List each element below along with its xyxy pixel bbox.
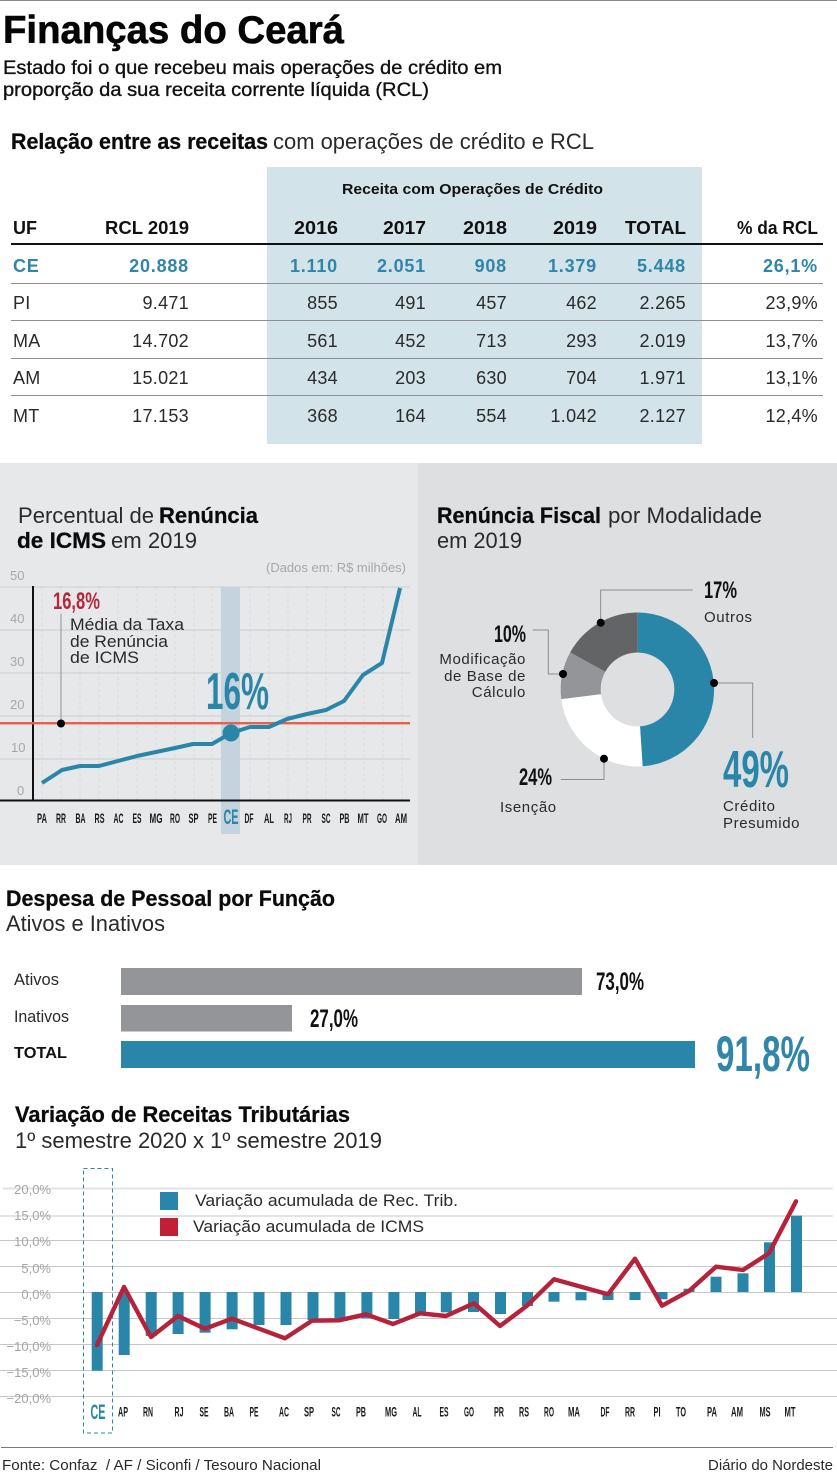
state labels: GO — [464, 1404, 474, 1420]
callout: Isenção 24% — [500, 755, 608, 816]
heading: tax revenue variation: Variação de Receitas Tributárias — [15, 1102, 350, 1127]
row PI — [13, 293, 818, 313]
row CE: 20.888 — [129, 256, 189, 276]
y axis labels: 10 — [11, 740, 25, 755]
callout: Modificação de Base de Cálculo 10% — [439, 621, 567, 701]
state labels: AC — [114, 810, 124, 826]
state labels: AP — [118, 1404, 128, 1420]
header row: 2019 — [553, 218, 597, 238]
state labels: DF — [600, 1404, 610, 1420]
line chart: ICMS waiver by state — [0, 568, 410, 834]
state labels: AM — [731, 1404, 743, 1420]
row AM: 13,1% — [765, 368, 818, 388]
row AM: 704 — [566, 368, 597, 388]
subtitle: proporção da sua receita corrente líquida (RCL) — [3, 79, 429, 101]
heading: personnel expense: Ativos e Inativos — [6, 911, 165, 936]
average callout: de ICMS — [70, 649, 139, 667]
callout: Isenção 24%: 24% — [519, 764, 552, 791]
state labels: SP — [188, 810, 198, 826]
bar: Ativos: 73,0% — [596, 968, 644, 996]
state labels: AL — [264, 810, 274, 826]
state labels: BA — [224, 1404, 234, 1420]
row AM: 15.021 — [132, 368, 189, 388]
y axis labels: −10,0% — [7, 1339, 51, 1354]
row PI: 855 — [307, 293, 338, 313]
heading: waiver by type: por Modalidade — [608, 503, 762, 528]
row MT: MT — [13, 406, 40, 426]
y axis labels: −5,0% — [14, 1313, 51, 1328]
publisher credit: Diário do Nordeste — [708, 1458, 833, 1474]
state labels: DF — [244, 810, 254, 826]
state labels: MA — [568, 1404, 580, 1420]
y axis labels: 20 — [10, 697, 24, 712]
highlighted credit operations panel — [267, 167, 702, 444]
state labels: PR — [302, 810, 312, 826]
row PI: PI — [13, 293, 31, 313]
bar: Ativos — [14, 968, 644, 996]
row CE — [13, 256, 818, 276]
y axis labels: 30 — [10, 654, 24, 669]
heading: waiver by type: Renúncia Fiscal — [437, 503, 601, 528]
state labels: RS — [94, 810, 104, 826]
average callout: Média da Taxa — [70, 616, 185, 634]
heading: personnel expense: Despesa de Pessoal por Função — [6, 886, 335, 911]
callout: Modificação de Base de Cálculo 10%: 10% — [494, 621, 526, 648]
row AM: 434 — [307, 368, 338, 388]
bar: total — [14, 1026, 810, 1082]
state labels — [118, 1404, 796, 1420]
combo chart: tax revenue variation — [0, 1168, 837, 1433]
row MT — [13, 406, 818, 426]
row MT: 164 — [395, 406, 426, 426]
CE dot — [222, 724, 240, 742]
y axis labels: 40 — [10, 611, 24, 626]
table heading: Relação entre as receitas — [11, 129, 268, 154]
state labels: MT — [784, 1404, 796, 1420]
y axis labels — [7, 1182, 51, 1406]
state labels: RR — [56, 810, 66, 826]
waiver trend line — [42, 588, 400, 783]
y axis labels: 10,0% — [14, 1234, 51, 1249]
y axis labels: −15,0% — [7, 1365, 51, 1380]
heading: waiver by type: em 2019 — [437, 528, 522, 553]
row MA: 452 — [395, 331, 426, 351]
subtitle — [3, 57, 502, 101]
heading: waiver by type — [437, 503, 762, 553]
row CE: CE — [13, 256, 40, 276]
state labels: RJ — [284, 810, 292, 826]
heading: ICMS waiver: Percentual de — [18, 503, 154, 528]
heading: ICMS waiver: de ICMS — [17, 528, 106, 553]
heading: ICMS waiver — [17, 503, 259, 553]
state labels: MG — [385, 1404, 397, 1420]
row PI: 462 — [566, 293, 597, 313]
average line — [0, 722, 410, 724]
bar: Inativos: Inativos — [14, 1008, 69, 1026]
row MA: 2.019 — [639, 331, 686, 351]
state labels: PB — [356, 1404, 366, 1420]
row AM: 630 — [476, 368, 507, 388]
row PI: 9.471 — [142, 293, 189, 313]
y axis labels: 0,0% — [21, 1287, 51, 1302]
subtitle: Estado foi o que recebeu mais operações de crédito em — [3, 57, 502, 79]
table heading: com operações de crédito e RCL — [273, 129, 594, 154]
state labels: RR — [625, 1404, 635, 1420]
state labels: PE — [250, 1404, 258, 1420]
y axis labels: 0 — [17, 783, 24, 798]
heading: tax revenue variation: 1º semestre 2020 x 1º semestre 2019 — [15, 1128, 382, 1153]
CE highlight box — [84, 1168, 112, 1433]
callout: Crédito Presumido 49%: Presumido — [723, 815, 800, 832]
row MA: 293 — [566, 331, 597, 351]
title: Finanças do Ceará — [3, 9, 344, 52]
state labels: GO — [377, 810, 387, 826]
row MT: 368 — [307, 406, 338, 426]
callout: Isenção 24%: Isenção — [500, 799, 557, 816]
callout: Crédito Presumido 49% — [710, 679, 800, 832]
row MT: 17.153 — [132, 406, 189, 426]
CE highlight band — [221, 587, 240, 834]
average callout — [53, 588, 185, 728]
callout: Modificação de Base de Cálculo 10%: Cálculo — [472, 684, 526, 701]
row CE: 5.448 — [637, 256, 686, 276]
row MT: 554 — [476, 406, 507, 426]
row PI: 457 — [476, 293, 507, 313]
row AM — [13, 368, 818, 388]
state labels: AM — [395, 810, 407, 826]
row MT: 1.042 — [550, 406, 597, 426]
bar: Inativos — [14, 1005, 358, 1033]
y axis labels: 5,0% — [21, 1261, 51, 1276]
heading: personnel expense — [6, 886, 335, 936]
row MA: 13,7% — [765, 331, 818, 351]
header row: 2018 — [463, 218, 507, 238]
header row: 2016 — [294, 218, 338, 238]
state labels: RN — [143, 1404, 153, 1420]
row CE: 2.051 — [377, 256, 426, 276]
state labels: ES — [440, 1404, 448, 1420]
data unit note: (Dados em: R$ milhões) — [266, 561, 406, 575]
legend: Variação acumulada de Rec. Trib. — [195, 1191, 458, 1210]
callout: Outros 17%: Outros — [704, 609, 753, 626]
legend — [160, 1191, 458, 1236]
state labels: TO — [676, 1404, 686, 1420]
header row: UF — [13, 218, 37, 238]
CE axis label: CE — [224, 806, 238, 829]
average callout: 16,8% — [53, 588, 100, 615]
state labels: RO — [170, 810, 180, 826]
row AM: 1.971 — [639, 368, 686, 388]
header row: 2017 — [383, 218, 426, 238]
row MA — [13, 331, 818, 351]
state labels: RS — [519, 1404, 529, 1420]
header row — [13, 218, 818, 238]
y axis labels: −20,0% — [7, 1391, 51, 1406]
ICMS line — [97, 1201, 796, 1345]
row MT: 12,4% — [765, 406, 818, 426]
header row: RCL 2019 — [105, 218, 189, 238]
heading: ICMS waiver: em 2019 — [111, 528, 197, 553]
row CE: 1.379 — [548, 256, 597, 276]
state labels: MS — [760, 1404, 770, 1420]
callout: Modificação de Base de Cálculo 10%: de Base de — [444, 668, 526, 685]
table super-header: Receita com Operações de Crédito — [342, 182, 603, 198]
y axis labels: 15,0% — [14, 1208, 51, 1223]
row PI: 491 — [395, 293, 426, 313]
state labels: AL — [412, 1404, 422, 1420]
state labels: RO — [544, 1404, 554, 1420]
row AM: 203 — [395, 368, 426, 388]
state labels: BA — [76, 810, 86, 826]
state labels — [37, 810, 407, 826]
state labels: PA — [707, 1404, 717, 1420]
row MA: MA — [13, 331, 41, 351]
average callout: de Renúncia — [70, 633, 169, 651]
state labels: AC — [279, 1404, 289, 1420]
state labels: PR — [494, 1404, 504, 1420]
state labels: SC — [322, 810, 330, 826]
state labels: PB — [340, 810, 350, 826]
y axis labels — [10, 568, 25, 798]
row CE: 26,1% — [763, 256, 818, 276]
row CE: 1.110 — [290, 256, 338, 276]
revenue bars — [92, 1216, 802, 1371]
y axis labels: 20,0% — [14, 1182, 51, 1197]
state labels: ES — [132, 810, 142, 826]
row MA: 561 — [307, 331, 338, 351]
state labels: RJ — [174, 1404, 184, 1420]
row MA: 14.702 — [132, 331, 189, 351]
y axis labels: 50 — [10, 568, 24, 583]
callout: Modificação de Base de Cálculo 10%: Modificação — [439, 651, 526, 668]
heading: ICMS waiver: Renúncia — [159, 503, 259, 528]
state labels: MT — [358, 810, 369, 826]
panel: ICMS waiver — [0, 463, 418, 865]
bar: total: TOTAL — [14, 1045, 67, 1062]
row PI: 2.265 — [639, 293, 686, 313]
bar chart: personnel expense — [14, 968, 810, 1082]
callout: Crédito Presumido 49%: 49% — [723, 741, 789, 799]
state labels: SC — [332, 1404, 341, 1420]
state labels: SP — [304, 1404, 314, 1420]
panel: waiver by type — [418, 463, 837, 865]
callout: Outros 17%: 17% — [704, 577, 737, 604]
state labels: PA — [37, 810, 47, 826]
callout: Crédito Presumido 49%: Crédito — [723, 798, 776, 815]
state labels: PI — [654, 1404, 660, 1420]
header row: TOTAL — [625, 218, 686, 238]
donut chart — [561, 612, 714, 766]
state labels: MG — [150, 810, 163, 826]
bar: Inativos: 27,0% — [310, 1005, 358, 1033]
CE value: 16% — [206, 663, 269, 721]
row MT: 2.127 — [639, 406, 686, 426]
state labels: PE — [208, 810, 217, 826]
state labels: SE — [200, 1404, 208, 1420]
header row: % da RCL — [737, 218, 818, 238]
heading: tax revenue variation — [15, 1102, 382, 1153]
legend: Variação acumulada de ICMS — [193, 1217, 424, 1236]
row PI: 23,9% — [765, 293, 818, 313]
row MA: 713 — [476, 331, 507, 351]
table — [11, 167, 823, 444]
callout: Outros 17% — [597, 577, 753, 627]
bar: Ativos: Ativos — [14, 971, 59, 989]
source: Fonte: Confaz / AF / Siconfi / Tesouro Nacional — [2, 1458, 321, 1474]
table heading — [11, 129, 594, 154]
row CE: 908 — [475, 256, 507, 276]
row AM: AM — [13, 368, 41, 388]
CE label: CE — [90, 1401, 106, 1424]
